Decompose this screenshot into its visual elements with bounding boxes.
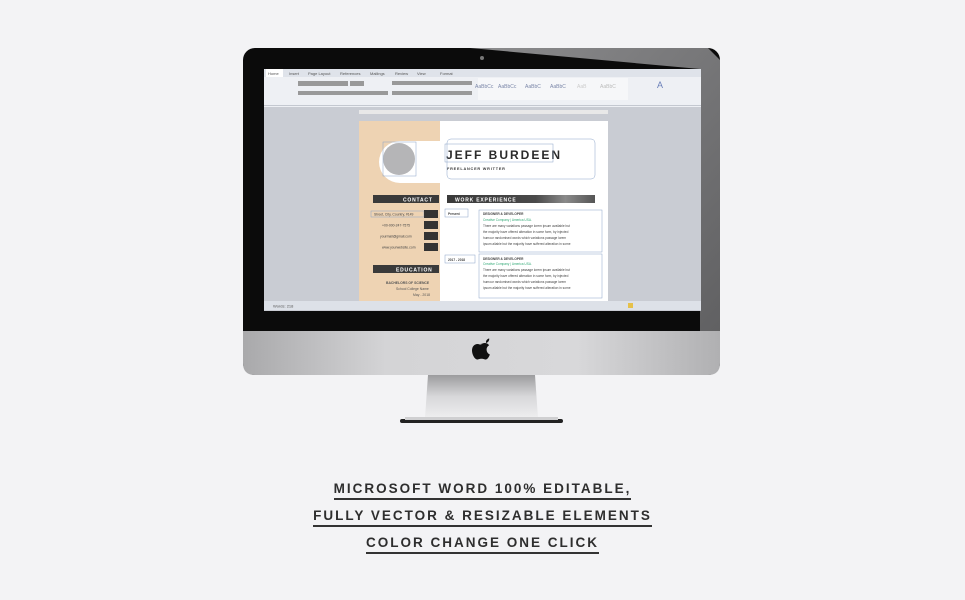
work entries: humour randomised words which variations passage lorem [483,280,566,284]
ribbon: Home [268,71,279,76]
work entries: There are many variations passage lorem ipsum available but [483,224,570,228]
status bar [264,301,701,310]
header pill [379,141,601,183]
ribbon: Format [440,71,454,76]
ribbon: Mailings [370,71,385,76]
ribbon: AaBbCc [475,84,494,90]
resume page: BACHELORS OF SCIENCE [386,281,430,285]
work entries: There are many variations passage lorem ipsum available but [483,268,570,272]
work entries: humour randomised words which variations passage lorem [483,236,566,240]
contact bar [373,195,439,203]
ruler [359,110,608,114]
work entries [445,209,602,298]
work experience bar [447,195,595,203]
ribbon: Review [395,71,408,76]
resume page: CONTACT [403,198,433,204]
contact items [371,211,424,250]
ribbon [264,69,701,107]
ribbon: Insert [289,71,300,76]
work entries: the majority have offered alteration in some form, by injected [483,230,569,234]
ribbon: A [657,80,663,90]
resume page: EDUCATION [396,268,433,274]
contact items: +00-000-247-7575 [382,224,410,228]
icon: apple logo [472,338,490,360]
work entries: the majority have offered alteration in some form, by injected [483,274,569,278]
ribbon: AaB [577,84,587,90]
resume page: FREELANCER WRITTER [447,167,506,171]
work entries: ipsum aliable but the majority have suffered alteration in some [483,286,571,290]
work entries: DESIGNER & DEVELOPER [483,257,524,261]
work entries: Creative Company | America USA. [483,218,532,222]
resume page [359,121,608,301]
work entries: DESIGNER & DEVELOPER [483,212,524,216]
ribbon: AaBbC [550,84,566,90]
monitor stand [400,375,563,423]
work entries: 2017 - 2018 [448,258,465,262]
ribbon: Page Layout [308,71,331,76]
ribbon: AaBbC [525,84,541,90]
resume page: May - 2018 [413,293,430,297]
monitor body [243,48,720,375]
ribbon: View [417,71,426,76]
status bar: Words: 218 [273,304,294,308]
contact items: yourmail@gmail.com [380,234,412,238]
name: JEFF BURDEEN [446,148,562,162]
resume page: School College Name [396,287,429,291]
work entries: ipsum aliable but the majority have suffered alteration in some [483,242,571,246]
screen: Word window [264,69,701,311]
ribbon: AaBbCc [498,84,517,90]
ribbon: References [340,71,360,76]
contact items: Street, City, Country, #149 [374,212,414,216]
ribbon: AaBbC [600,84,616,90]
contact items: www.yourwebsite.com [382,246,416,250]
education bar [373,265,439,273]
resume page: WORK EXPERIENCE [455,198,516,204]
caption line 1: MICROSOFT WORD 100% EDITABLE, [334,481,631,496]
caption line 2: FULLY VECTOR & RESIZABLE ELEMENTS [313,508,652,523]
work entries: Present [448,212,461,216]
work entries: Creative Company | America USA. [483,262,532,266]
caption line 3: COLOR CHANGE ONE CLICK [366,535,599,550]
